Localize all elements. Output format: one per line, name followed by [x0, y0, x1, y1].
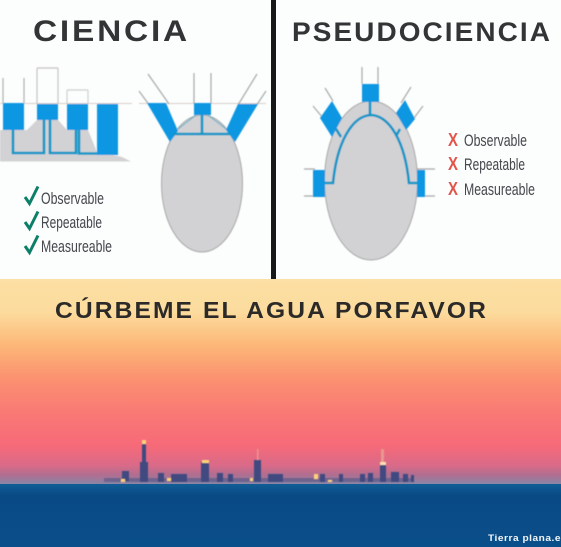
icon: green check [25, 212, 38, 228]
icon: red cross: X [448, 179, 458, 199]
label: observable: Observable [41, 189, 104, 208]
panel: pseudociencia [292, 17, 552, 260]
sea [0, 484, 561, 547]
label: observable: Observable [464, 131, 527, 150]
heading: pseudociencia: PSEUDOCIENCIA [292, 17, 552, 47]
heading: ciencia: CIENCIA [33, 15, 190, 48]
diagram: curved water on globe [304, 67, 435, 260]
panel: background [0, 0, 561, 280]
list: ciencia checks [25, 186, 112, 256]
heading: cúrbeme el agua: CÚRBEME EL AGUA PORFAVOR [55, 296, 488, 323]
icon: red cross: X [448, 130, 458, 150]
icon: red cross: X [448, 154, 458, 174]
label: repeatable: Repeatable [464, 155, 525, 174]
panel: photo of skyline across water [0, 279, 561, 547]
label: measureable: Measureable [464, 180, 535, 199]
icon: green check [25, 236, 38, 252]
diagram: ellipse with level water [139, 73, 266, 252]
diagram: cross section of level water [0, 68, 132, 162]
sky [0, 279, 561, 484]
label: measureable: Measureable [41, 237, 112, 256]
icon: green check [25, 186, 38, 204]
skyline [104, 440, 414, 482]
panel: ciencia [0, 15, 266, 256]
watermark: Tierra plana.e [488, 533, 561, 544]
divider [271, 0, 276, 279]
label: repeatable: Repeatable [41, 213, 102, 232]
list: pseudociencia crosses [448, 130, 535, 199]
